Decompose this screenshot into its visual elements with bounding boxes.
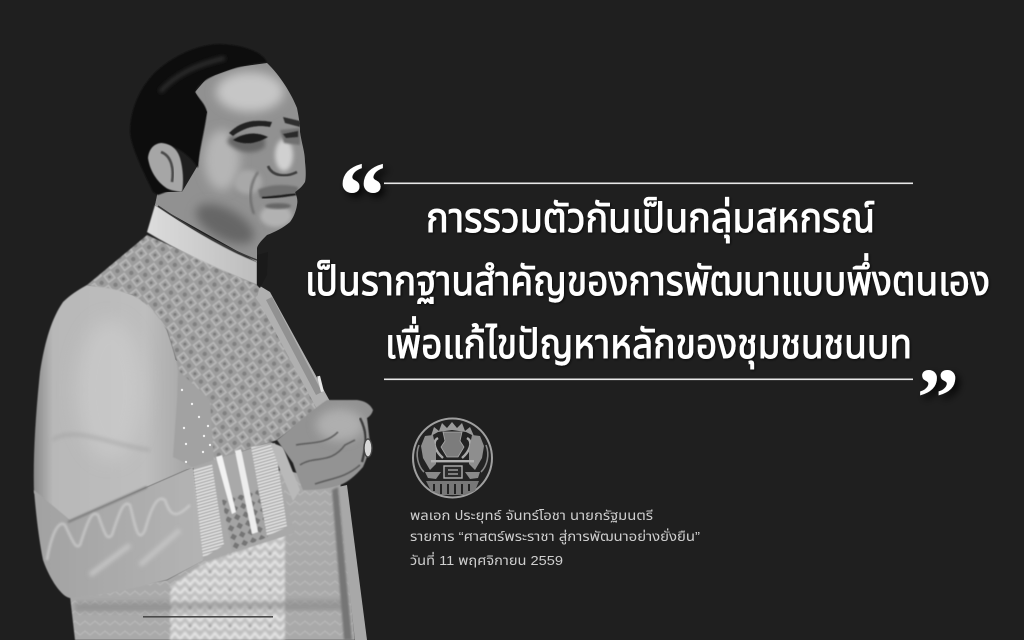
attribution text bbox=[410, 508, 700, 568]
ear bbox=[148, 143, 183, 192]
nose highlight bbox=[275, 139, 293, 171]
far brow bbox=[283, 117, 300, 127]
main quote bbox=[305, 195, 990, 369]
neck bbox=[155, 190, 257, 262]
hand bbox=[277, 400, 373, 490]
dark hem line bbox=[143, 616, 273, 618]
upper lip shade bbox=[258, 185, 298, 198]
cuff stripes left bbox=[193, 464, 224, 558]
hair bbox=[130, 44, 267, 195]
bright silver brocade panel bbox=[170, 535, 285, 640]
opening quotation mark: “ bbox=[338, 142, 386, 249]
quote line 1: การรวมตัวกันเป็นกลุ่มสหกรณ์ bbox=[426, 195, 875, 243]
vest patterned panel bbox=[87, 235, 318, 461]
smile line bbox=[251, 172, 258, 214]
date: วันที่ 11 พฤศจิกายน 2559 bbox=[410, 551, 563, 568]
quote line 3: เพื่อแก้ไขปัญหาหลักของชุมชนชนบท bbox=[385, 316, 912, 369]
seal urn bbox=[441, 432, 464, 457]
cuff edge bbox=[270, 442, 300, 501]
seal right inner lion bbox=[462, 438, 470, 458]
cuff bbox=[193, 442, 300, 561]
lapel pin bbox=[317, 376, 324, 392]
cuff base bbox=[193, 442, 295, 561]
vest plain area with sequins bbox=[160, 350, 235, 472]
chin highlight bbox=[260, 205, 292, 227]
seal side feet bbox=[425, 472, 480, 479]
seal frieze notches bbox=[434, 484, 469, 494]
under lip shadow bbox=[265, 203, 291, 209]
forehead highlight bbox=[216, 72, 284, 112]
face base tone bbox=[155, 63, 306, 262]
hand veins bbox=[296, 432, 360, 484]
forearm bbox=[34, 467, 205, 598]
vest sequins bbox=[181, 389, 211, 463]
portrait figure in profile bbox=[34, 44, 373, 640]
temple highlight bbox=[204, 130, 240, 190]
hem shadow band bbox=[75, 600, 345, 612]
seal right outer scroll bbox=[481, 445, 488, 472]
closing quotation mark: ” bbox=[917, 352, 959, 445]
government seal emblem bbox=[413, 418, 492, 498]
collar top shadow line bbox=[158, 206, 257, 260]
upper placket bbox=[257, 286, 332, 409]
hand shading bbox=[296, 409, 366, 484]
seal left guardian bbox=[421, 435, 436, 470]
forearm lower sheen bbox=[90, 530, 180, 575]
collar opening bbox=[257, 252, 268, 288]
forearm wavy highlights bbox=[47, 499, 190, 560]
seal plinth motif bbox=[448, 470, 458, 474]
programme name: รายการ “ศาสตร์พระราชา สู่การพัฒนาอย่างยั่งยืน” bbox=[410, 528, 700, 544]
seal left outer scroll bbox=[417, 445, 424, 472]
forearm dark fold bbox=[68, 487, 147, 522]
mouth bbox=[262, 194, 296, 198]
upper arm soft highlight bbox=[76, 320, 144, 460]
far eye bbox=[283, 131, 298, 138]
near brow bbox=[229, 121, 272, 136]
cuff lower pattern bbox=[222, 490, 268, 551]
speaker name: พลเอก ประยุทธ์ จันทร์โอชา นายกรัฐมนตรี bbox=[410, 508, 653, 523]
nostril shadow bbox=[268, 166, 297, 175]
collar bbox=[147, 205, 257, 285]
hand highlight bbox=[316, 409, 364, 441]
top rule bbox=[384, 182, 913, 184]
face bbox=[155, 63, 306, 262]
far eye shadow bbox=[280, 128, 300, 145]
seal crest flames bbox=[431, 422, 474, 436]
hand dark fingers edge bbox=[360, 418, 366, 462]
ring bbox=[364, 439, 372, 457]
ear inner shade bbox=[161, 152, 173, 182]
placket weave band bbox=[266, 297, 322, 395]
seal left inner lion bbox=[435, 438, 443, 458]
sleeve upper arm bbox=[34, 285, 193, 522]
upper arm crease bbox=[52, 435, 150, 450]
cuff stripes right bbox=[251, 443, 287, 536]
seal disc bbox=[413, 418, 492, 498]
placket shadow bbox=[332, 487, 352, 640]
lower placket bbox=[338, 485, 367, 640]
hair sheen bbox=[160, 58, 225, 92]
seal right guardian bbox=[469, 435, 484, 470]
jaw shadow bbox=[192, 200, 258, 248]
cuff bright band left bbox=[216, 455, 236, 514]
under eye shadow bbox=[227, 136, 265, 152]
bottom rule bbox=[384, 378, 913, 380]
seal bar bbox=[431, 460, 474, 462]
seal plinth bbox=[444, 466, 462, 478]
near eye bbox=[233, 133, 268, 143]
cheek highlight bbox=[234, 170, 262, 194]
seal base frieze bbox=[426, 481, 479, 495]
lower jacket base bbox=[70, 470, 355, 640]
cuff bright band right bbox=[235, 449, 258, 534]
